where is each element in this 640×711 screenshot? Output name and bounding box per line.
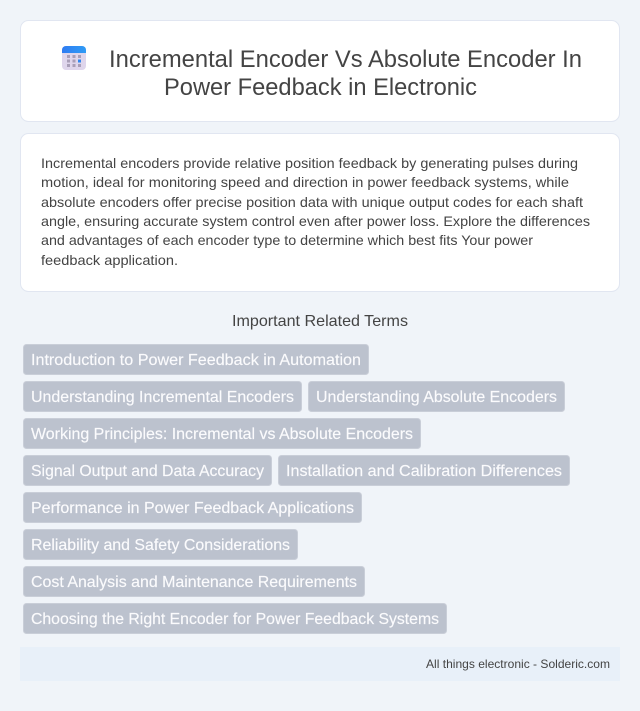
chip: choosing the right encoder [24,604,446,634]
panel: summary paragraph: absolute encoders offer precise position data with unique output codes for each shaft [41,194,583,210]
panel: summary paragraph: motion, ideal for monitoring speed and direction in power feedback systems, while [41,174,569,190]
chip: signal output: Signal Output and Data Accuracy [31,463,264,480]
panel: summary paragraph: and advantages of each encoder type to determine which best fits Your power [41,232,533,248]
panel: title card [20,20,620,122]
panel: related terms chips [24,344,570,634]
chip: performance: Performance in Power Feedback Applications [31,500,354,517]
chip: signal output [24,456,272,486]
chip: choosing the right encoder: Choosing the Right Encoder for Power Feedback Systems [31,611,439,628]
icon: calendar [62,46,86,70]
panel: summary paragraph [20,134,620,292]
panel: summary paragraph: Incremental encoders provide relative position feedback by generating pulses during [41,155,578,171]
chip: reliability: Reliability and Safety Considerations [31,537,290,554]
chip: absolute encoders: Understanding Absolute Encoders [316,389,557,406]
chip: working principles: Working Principles: Incremental vs Absolute Encoders [31,426,413,443]
title: Power Feedback in Electronic [164,74,477,101]
panel: summary paragraph: angle, ensuring accurate system control even after power loss. Explore the differences [41,213,590,229]
chip: incremental encoders [24,382,302,412]
chip: absolute encoders [308,382,564,412]
chip: working principles [24,418,420,448]
title [109,46,582,101]
chip: cost analysis: Cost Analysis and Maintenance Requirements [31,574,357,591]
chip: introduction: Introduction to Power Feedback in Automation [31,352,361,369]
chip: incremental encoders: Understanding Incremental Encoders [31,389,294,406]
chip: installation [278,456,570,486]
panel: summary paragraph: feedback application. [41,252,178,268]
chip: reliability [24,530,298,560]
chip: performance [24,492,362,522]
footer: All things electronic - Solderic.com [426,657,610,671]
chip: installation: Installation and Calibration Differences [286,463,562,480]
chip: introduction [24,344,368,374]
chip: cost analysis [24,566,364,596]
heading: important related terms: Important Related Terms [232,313,408,330]
footer [20,647,620,681]
title: Incremental Encoder Vs Absolute Encoder In [109,46,582,73]
